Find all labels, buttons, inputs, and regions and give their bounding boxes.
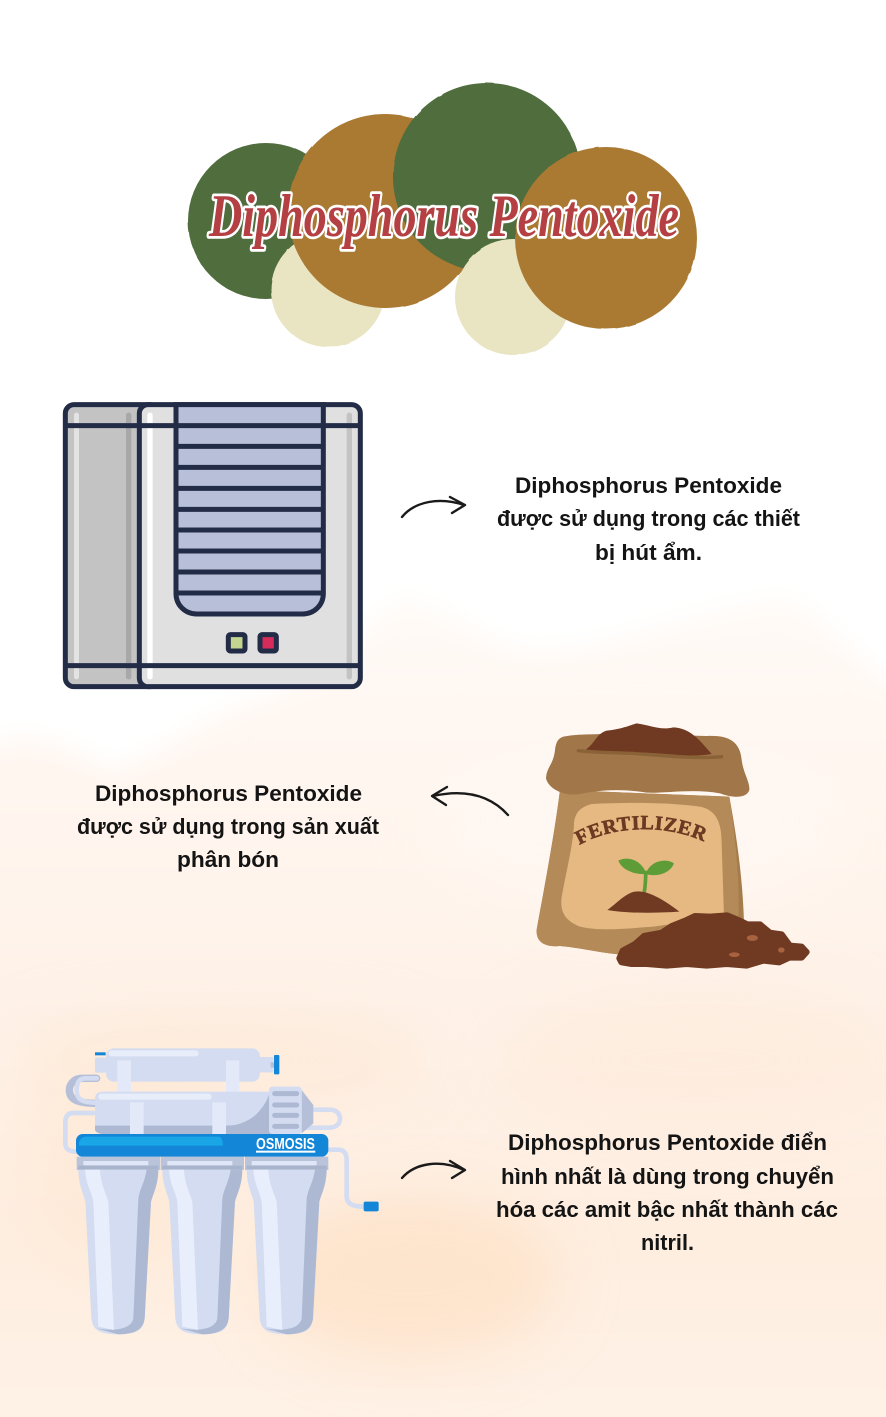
- icon: fertilizer bag: [536, 723, 810, 969]
- green button: [228, 635, 245, 651]
- dehumidifier front body: [139, 405, 360, 687]
- text: nitrile conversion use: Diphosphorus Pentoxide điển: [508, 1130, 827, 1155]
- filter canisters: [77, 1157, 328, 1334]
- label text: [579, 829, 717, 848]
- bag neck: [546, 733, 749, 797]
- dehumidifier vent panel: [176, 405, 323, 614]
- icon: fertilizer bag: FERTILIZER: [573, 816, 706, 846]
- arrow: dehumidifier to text: [402, 497, 465, 517]
- text: fertilizer use: Diphosphorus Pentoxide: [95, 781, 362, 806]
- red button: [260, 635, 276, 651]
- bag body: [537, 790, 744, 955]
- text: nitrile conversion use: hình nhất là dùng trong chuyển: [501, 1164, 834, 1189]
- icon: dehumidifier: [65, 405, 360, 687]
- text: fertilizer use: được sử dụng trong sản xuất: [77, 814, 379, 839]
- dehumidifier side body: [65, 405, 159, 687]
- soil pile: [619, 915, 807, 966]
- bag label: [561, 803, 724, 929]
- icon: reverse osmosis water filter: [65, 1048, 379, 1334]
- top cartridge: [95, 1048, 279, 1092]
- title: Diphosphorus Pentoxide: [208, 183, 679, 249]
- text: nitrile conversion use: hóa các amit bậc nhất thành các: [496, 1197, 838, 1222]
- text: dehumidifier use: bị hút ẩm.: [595, 540, 702, 565]
- text: nitrile conversion use: [496, 1130, 838, 1255]
- blue band: [76, 1134, 328, 1157]
- arrow: fertilizer to text: [432, 787, 508, 815]
- text: dehumidifier use: Diphosphorus Pentoxide: [515, 473, 782, 498]
- brand label: OSMOSIS: [256, 1136, 315, 1153]
- text: nitrile conversion use: nitril.: [641, 1230, 694, 1255]
- text: fertilizer use: phân bón: [177, 847, 279, 872]
- text: dehumidifier use: được sử dụng trong các thiết: [497, 506, 800, 531]
- circles: title backdrop: [188, 83, 697, 355]
- tubes: [65, 1078, 365, 1207]
- text: fertilizer use: [77, 781, 379, 872]
- text: dehumidifier use: [497, 473, 800, 565]
- sprout: [607, 859, 679, 913]
- title badge: [188, 83, 697, 355]
- middle cartridge: [95, 1087, 313, 1134]
- arrow: filter to text: [402, 1161, 465, 1178]
- soil in bag: [586, 723, 712, 756]
